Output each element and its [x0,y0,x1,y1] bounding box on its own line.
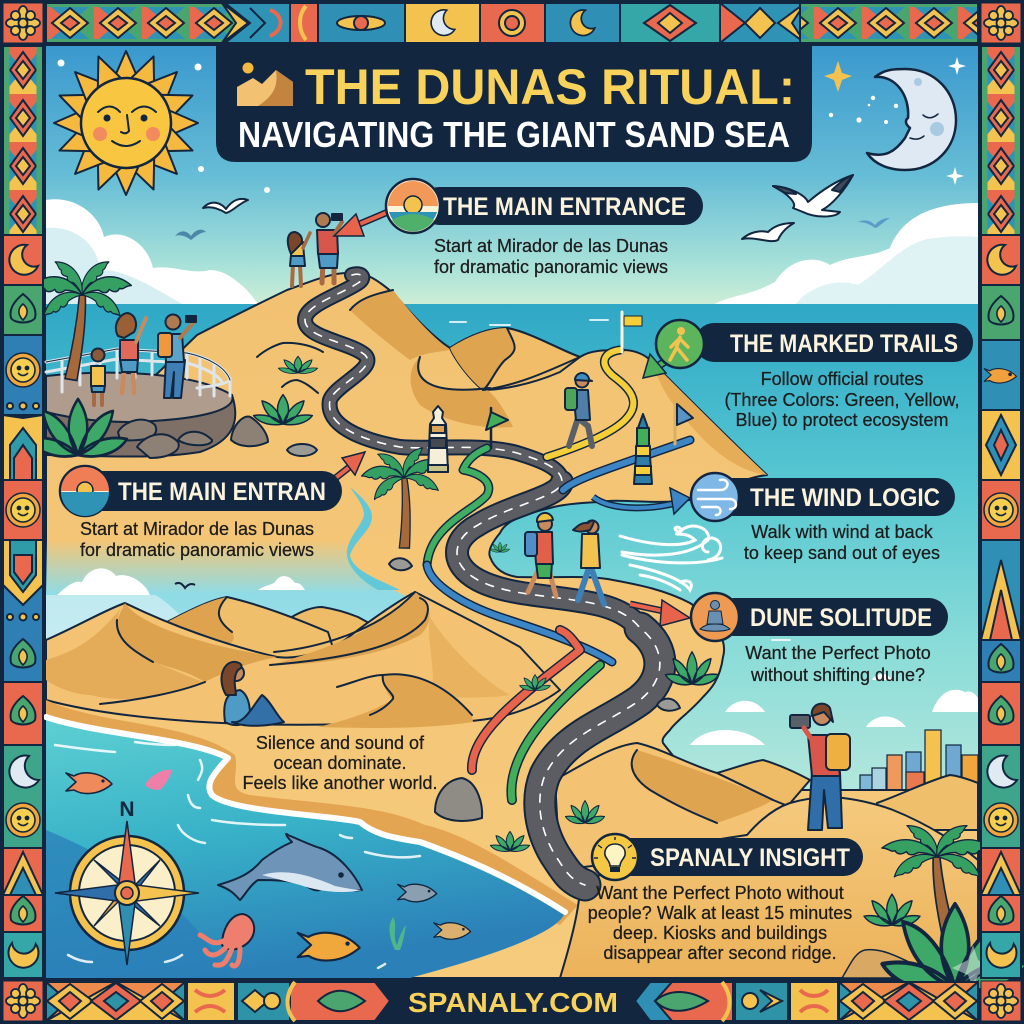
tropical foliage bottom right [882,904,1024,990]
description line two: to keep sand out of eyes [744,543,940,563]
city skyline [860,730,978,797]
callout: the wind logic [691,473,955,563]
heading: THE MAIN ENTRAN [118,478,326,506]
heading: THE MAIN ENTRANCE [443,193,686,221]
text block: silence: Silence and sound of [256,733,425,753]
small clouds lower left [57,568,305,595]
text block: silence [242,733,438,793]
sea creatures and ripples [55,742,471,968]
heading: DUNE SOLITUDE [750,604,932,632]
dunes left group [46,592,560,728]
pink creature [145,770,172,790]
octopus [200,914,254,966]
stars [824,57,966,185]
description line two: for dramatic panoramic views [434,257,668,277]
compass rose [55,821,199,965]
bird lower left [175,583,195,588]
person: child at viewpoint [91,348,105,405]
white water ripples [55,742,420,968]
rocks [118,417,680,821]
seagulls [175,175,890,241]
dolphin [218,834,362,900]
heading: THE WIND LOGIC [750,484,940,512]
person: man with binoculars on summit [316,213,342,283]
sun with smiling face [54,51,198,195]
description line four: disappear after second ridge. [603,943,837,963]
description line two: (Three Colors: Green, Yellow, [724,390,960,410]
decorative frame: right border [981,46,1021,978]
crescent moon [867,69,956,170]
palm trees [33,256,992,938]
description: Follow official routes [761,369,923,389]
icon: sunset badge [60,466,110,516]
person: sitting woman on dune [221,662,284,726]
wind swirls [620,526,784,630]
main sand landmass [46,273,978,978]
description line two: people? Walk at least 15 minutes [588,903,852,923]
callout: the main entran [60,466,342,560]
text line two: ocean dominate. [273,753,407,773]
stream [347,487,400,590]
seaweed [389,917,406,950]
person: walker with backpack [525,513,556,596]
yellow flag [622,312,642,352]
callout: dune solitude [691,593,948,685]
person: hiker on trail [565,373,592,446]
title line two: NAVIGATING THE GIANT SAND SEA [238,114,790,155]
gold fish [298,933,360,961]
arrow: from main entran [333,452,365,480]
shoreline foam [46,717,565,912]
heading: THE MARKED TRAILS [730,330,958,358]
icon: sand dunes and sun [237,62,293,106]
footer website: SPANALY.COM [408,987,618,1018]
upper hill dunes [257,290,767,475]
description: Walk with wind at back [751,522,934,542]
sky sparkle dots [58,60,270,193]
foreground dunes right [555,743,978,978]
callout: spanaly insight [588,834,863,963]
description line three: deep. Kiosks and buildings [613,923,827,943]
description line three: Blue) to protect ecosystem [735,410,949,430]
icon: meditation [691,593,739,641]
clouds right [715,203,978,304]
description: Want the Perfect Photo without [596,883,844,903]
decorative frame: bottom border [46,982,978,1021]
faded lower left sky [46,540,415,660]
sea ripples [450,320,790,640]
arrow: to the wind logic [593,488,690,514]
arrow: to main entrance [334,212,388,236]
title line one: THE DUNAS RITUAL: [305,59,795,115]
scene background: sky [46,46,978,306]
icon: wind [691,473,739,521]
description line two: for dramatic panoramic views [80,540,314,560]
decorative frame: left border [3,46,43,978]
compass N label: N [119,798,135,821]
callout: the main entrance [386,179,703,277]
description line two: without shifting dune? [750,665,925,685]
small plant bottom right [864,894,920,926]
lighthouse marker [428,406,448,472]
callout: the marked trails [656,320,973,430]
arrow: to marked trails [643,352,680,378]
icon: light bulb [592,834,638,880]
wet sand band [46,700,578,925]
description: Start at Mirador de las Dunas [434,236,668,256]
description: Start at Mirador de las Dunas [80,519,314,539]
small clouds lower right [690,674,978,745]
coloured trails [427,350,690,800]
clouds left [46,199,258,304]
icon: sunrise badge [386,179,440,233]
heading: SPANALY INSIGHT [650,844,850,872]
plants [29,356,719,852]
person: woman at viewpoint [116,313,146,393]
dark deep water [46,830,236,978]
blue flag [675,402,693,444]
text line three: Feels like another world. [242,773,438,793]
title panel [216,46,812,162]
viewpoint platform with railing [46,349,235,457]
decorative frame: top border [46,3,978,43]
arrow: to dune solitude [630,600,690,626]
person: child on summit [288,232,310,286]
road: winding asphalt path [305,274,660,885]
ocean [46,717,565,978]
grey fish [398,884,437,902]
tan fish [434,923,471,939]
icon: walking figure [656,320,704,368]
fish orange [66,773,112,794]
description: Want the Perfect Photo [745,643,931,663]
striped trail post [634,414,652,484]
sea and lower sky band [46,304,978,834]
person: man at viewpoint [158,314,196,398]
green flag [486,408,508,448]
sand rock bottom right [842,950,925,978]
person: walker in yellow [573,520,604,604]
person: photographer with backpack [790,704,850,830]
watermark sparkle [952,945,992,988]
